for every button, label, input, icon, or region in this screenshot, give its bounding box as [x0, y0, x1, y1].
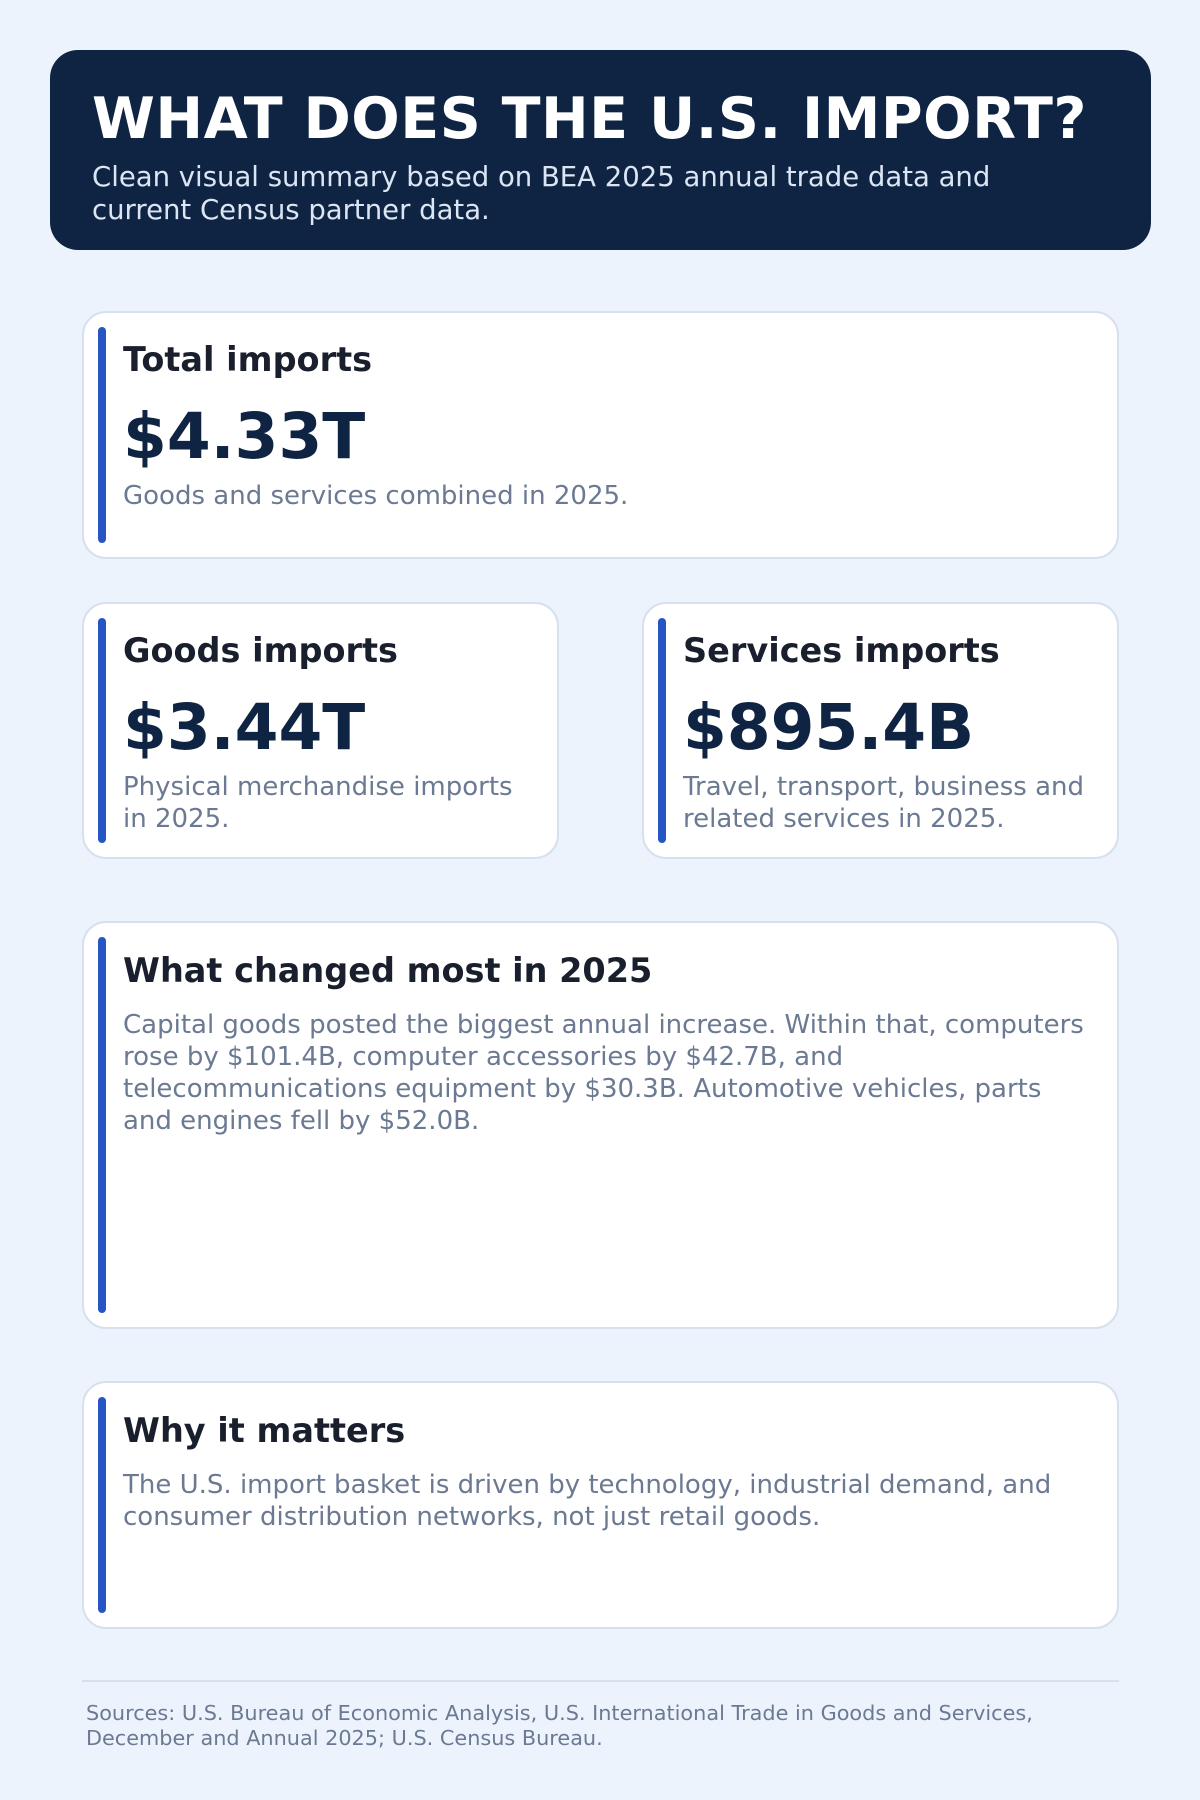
panel: services imports [642, 602, 1119, 859]
text: why it matters [122, 1470, 1051, 1532]
title: WHAT DOES THE U.S. IMPORT? [92, 86, 1087, 152]
text: what changed: rose by $101.4B, computer accessories by $42.7B, and [123, 1042, 843, 1072]
text: what changed: Capital goods posted the biggest annual increase. Within that, computers [123, 1010, 1084, 1040]
heading: services: Services imports [683, 631, 1000, 670]
heading: what changed: What changed most in 2025 [123, 951, 652, 990]
panel: goods imports [82, 602, 559, 859]
value: services: $895.4B [683, 691, 974, 764]
heading: total imports: Total imports [123, 340, 372, 379]
value: goods: $3.44T [123, 691, 365, 764]
panel: why it matters [82, 1381, 1119, 1629]
panel: total imports [82, 311, 1119, 559]
text: what changed [123, 1010, 1084, 1136]
text: why it matters: The U.S. import basket is driven by technology, industrial demand, and [123, 1470, 1051, 1500]
description: services: Travel, transport, business and [683, 772, 1084, 802]
description: services: related services in 2025. [683, 804, 1005, 834]
text: what changed: telecommunications equipment by $30.3B. Automotive vehicles, parts [123, 1074, 1041, 1104]
panel: what changed [82, 921, 1119, 1329]
value: total: $4.33T [123, 400, 365, 473]
sources footer: Sources: U.S. Bureau of Economic Analysis, U.S. International Trade in Goods and Services, [86, 1701, 1033, 1725]
heading: goods: Goods imports [123, 631, 398, 670]
sources footer: December and Annual 2025; U.S. Census Bureau. [86, 1726, 603, 1750]
text: what changed: and engines fell by $52.0B. [123, 1106, 479, 1136]
description: goods: Physical merchandise imports [123, 772, 513, 802]
text: why it matters: consumer distribution networks, not just retail goods. [123, 1502, 820, 1532]
description: goods: in 2025. [123, 804, 229, 834]
description: total: Goods and services combined in 2025. [123, 481, 628, 511]
header [50, 50, 1151, 250]
heading: why it matters: Why it matters [123, 1411, 405, 1450]
subtitle: Clean visual summary based on BEA 2025 annual trade data and [92, 161, 990, 193]
subtitle [92, 161, 990, 226]
sources footer [82, 1680, 1119, 1751]
description: goods [123, 772, 513, 834]
subtitle: current Census partner data. [92, 194, 490, 226]
description: services [682, 772, 1084, 834]
